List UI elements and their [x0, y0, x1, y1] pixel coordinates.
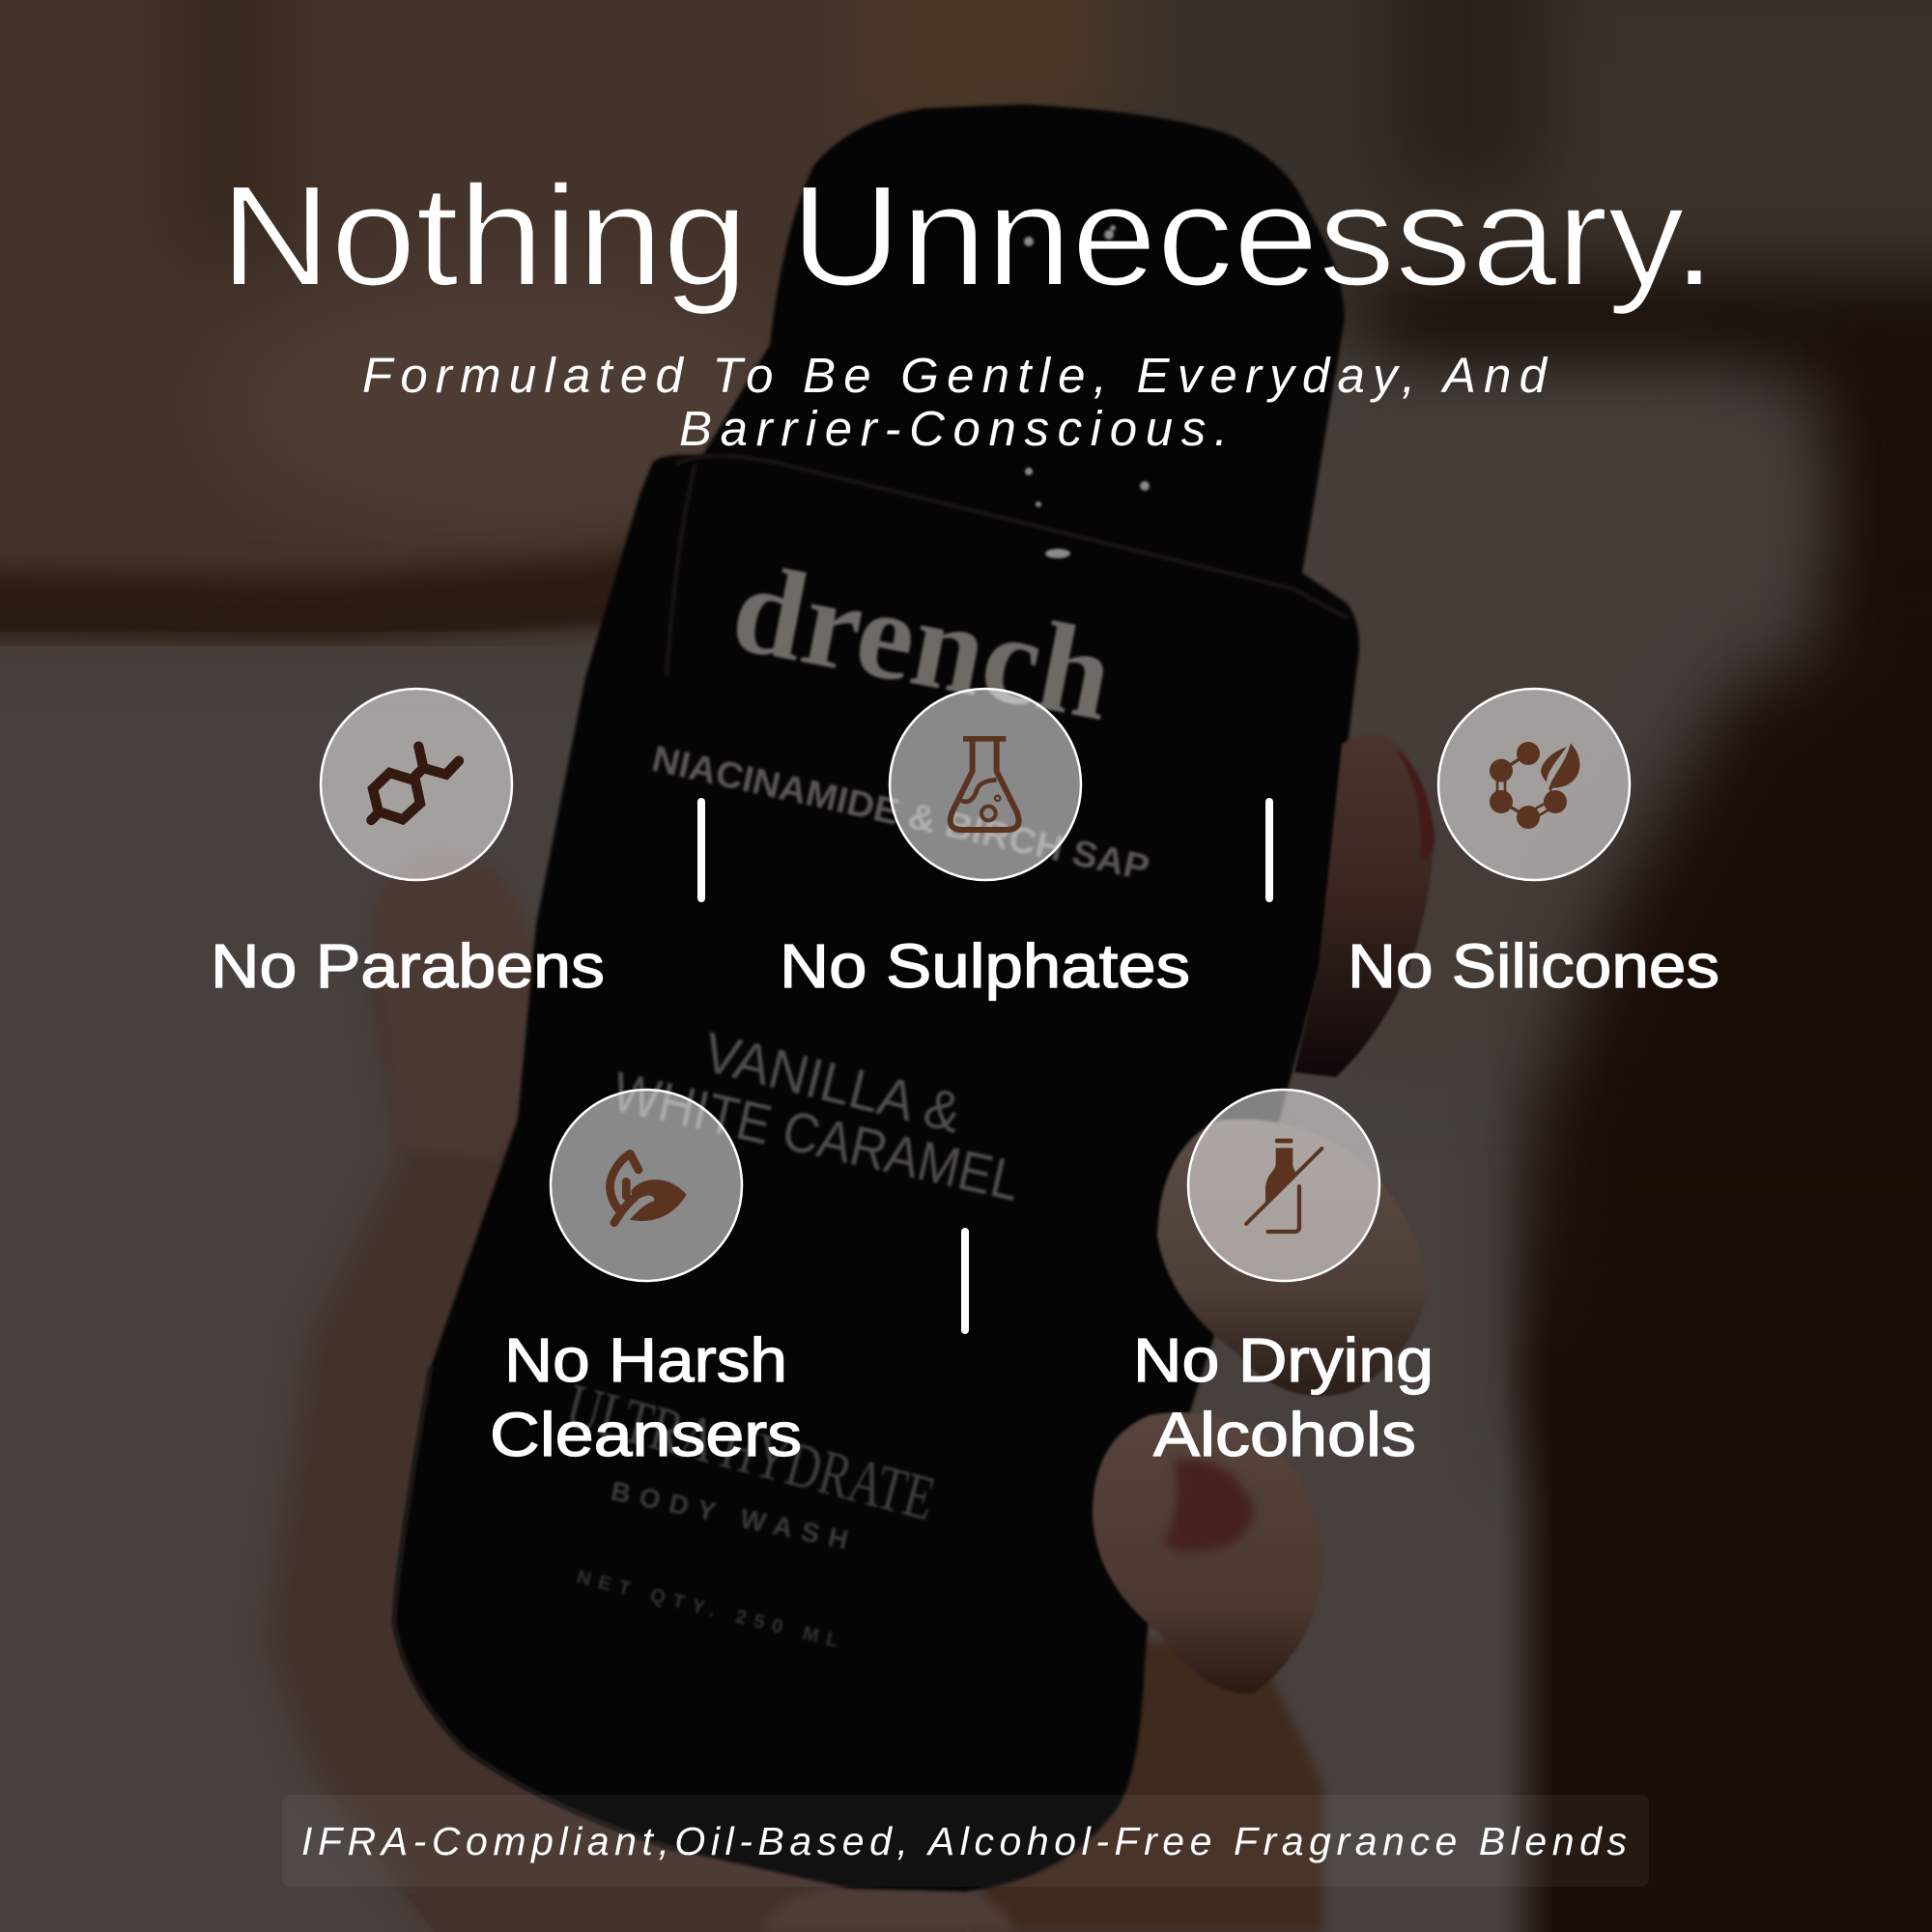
bottle label printing: WHITE CARAMEL	[607, 1060, 1026, 1213]
bottle lower edge highlight	[394, 1367, 676, 1850]
icon: molecule with leaf	[1438, 689, 1630, 880]
left finger	[370, 850, 560, 1159]
lower hand right side	[966, 1642, 1323, 1932]
footer note bar	[282, 1795, 1649, 1887]
water droplets on bottle	[1024, 225, 1150, 558]
label	[1133, 1325, 1434, 1469]
bottle label printing: ULTRA HYDRATE	[559, 1371, 942, 1534]
subtitle: Formulated To Be Gentle, Everyday, And	[362, 348, 1548, 403]
divider	[961, 1228, 969, 1334]
label: Cleansers	[490, 1400, 802, 1469]
feature: no silicones	[1348, 689, 1719, 1001]
bottom fingertip	[763, 1884, 1014, 1932]
fingernail	[1164, 1460, 1254, 1551]
label	[490, 1325, 802, 1469]
subtitle	[362, 348, 1548, 456]
label: No Silicones	[1348, 931, 1719, 1001]
bottle label printing: VANILLA &	[697, 1021, 968, 1145]
bottle label printing: BODY WASH	[609, 1476, 851, 1555]
bottle label printing	[559, 535, 1153, 1652]
bottle label printing: NIACINAMIDE & BIRCH SAP	[648, 739, 1153, 890]
footer note bar: IFRA-Compliant,Oil-Based, Alcohol-Free Fragrance Blends	[301, 1819, 1627, 1863]
icon: crossed bottle	[1188, 1090, 1379, 1281]
title: Nothing Unnecessary.	[220, 156, 1716, 316]
icon: flask	[890, 689, 1081, 880]
hand palm behind the bottle	[265, 966, 966, 1932]
label: No Parabens	[211, 931, 605, 1001]
divider	[1265, 798, 1273, 902]
lower hand bottom edge	[406, 1893, 966, 1932]
feature: no parabens	[211, 689, 605, 1001]
bottle label printing: NET QTY. 250 ML	[575, 1567, 840, 1652]
fingers right side holding the bottle	[1093, 735, 1435, 1693]
feature: no drying alcohols	[1133, 1090, 1434, 1469]
bottle shoulder ridge	[667, 456, 1348, 676]
label: Alcohols	[1153, 1400, 1416, 1469]
feature: no sulphates	[780, 689, 1190, 1001]
label: No Sulphates	[780, 931, 1190, 1001]
icon: molecule	[321, 689, 512, 880]
dark forearm shadow band	[0, 483, 869, 609]
icon: leaves	[551, 1090, 742, 1281]
label: No Drying	[1133, 1325, 1434, 1395]
bottle label printing: drench	[722, 535, 1123, 748]
divider	[697, 798, 705, 902]
feature: no harsh cleansers	[490, 1090, 802, 1469]
label: No Harsh	[504, 1325, 787, 1395]
bottle	[394, 104, 1359, 1891]
subtitle: Barrier-Conscious.	[679, 401, 1228, 456]
